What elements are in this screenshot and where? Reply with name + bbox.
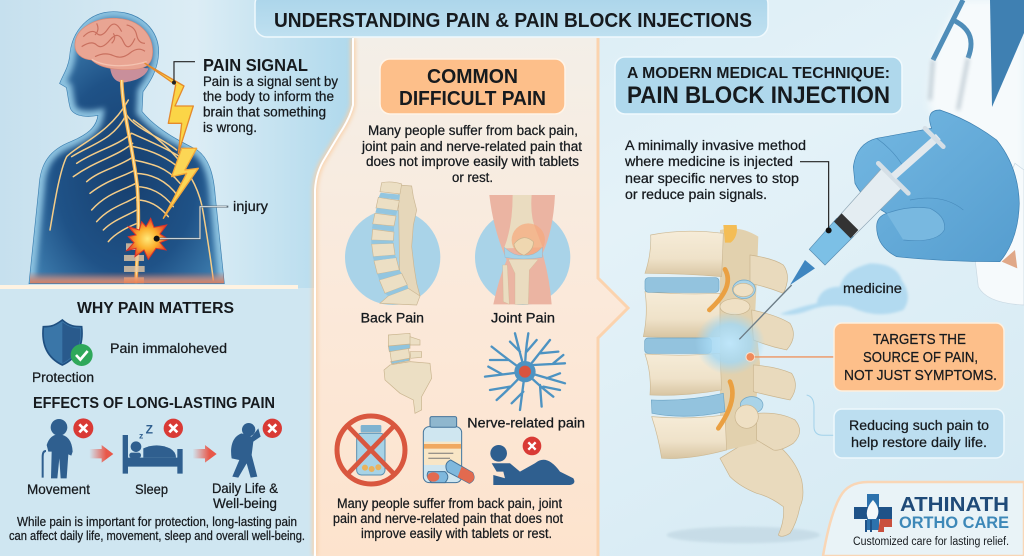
badge: sleep x <box>164 419 183 438</box>
body silhouette <box>29 12 224 283</box>
lightning bolt upper <box>145 63 193 153</box>
badge: movement x <box>73 418 93 438</box>
nerve tab <box>723 225 737 243</box>
panel: pain signal <box>0 0 356 288</box>
icon: person sleeping in bed <box>123 419 183 474</box>
text: pain signal description <box>203 74 338 135</box>
heading box: pain block injection: PAIN BLOCK INJECTION <box>627 82 890 109</box>
icon: person sleeping in bed: Z <box>146 423 153 437</box>
nerves <box>50 100 213 280</box>
title banner <box>255 0 768 37</box>
pain leader line <box>174 62 195 83</box>
text: technique description: near specific nerves to stop <box>625 171 799 186</box>
heading box: common difficult pain <box>380 59 565 114</box>
logo panel <box>823 482 1024 556</box>
text: technique description: A minimally invasive method <box>625 138 806 153</box>
doctor coat illustration <box>929 0 1024 210</box>
intervertebral discs <box>645 278 763 416</box>
text: closing description: improve easily with tablets or rest. <box>361 526 552 541</box>
arrow: movement to sleep <box>89 445 113 463</box>
label: daily life and well-being: Well-being <box>213 495 277 511</box>
sacrum <box>720 440 803 536</box>
label: nerve-related pain: Nerve-related pain <box>467 414 585 430</box>
spine illustration <box>643 225 834 543</box>
text: pain signal description: Pain is a signal sent by <box>203 74 338 89</box>
icon: crossed-out bottle <box>337 416 405 484</box>
text: pain signal description: the body to inform the <box>203 89 334 104</box>
vertebrae bodies <box>643 231 727 459</box>
label: protection: Protection <box>32 370 94 385</box>
leader dot <box>172 81 176 85</box>
label: pain description: Pain immaloheved <box>110 341 227 356</box>
red glow <box>30 272 224 283</box>
callout: targets the source: NOT JUST SYMPTOMS. <box>844 367 997 384</box>
leader line to syringe <box>800 162 829 230</box>
text: pain summary <box>9 515 305 543</box>
text: description: does not improve easily with tablets <box>366 154 579 169</box>
icon: joint pain knee <box>475 195 570 305</box>
nerve roots <box>709 269 732 428</box>
text: technique description: or reduce pain signals. <box>625 187 767 202</box>
text: pain signal description: brain that something <box>203 104 326 120</box>
callout: restore daily life: help restore daily life. <box>851 434 987 450</box>
callout: targets the source <box>834 323 1004 391</box>
text: description: joint pain and nerve-related pain that <box>361 139 582 154</box>
callout: targets the source: SOURCE OF PAIN, <box>863 349 978 366</box>
label: daily life and well-being: Daily Life & <box>212 480 279 496</box>
human figure with nervous system <box>29 12 228 283</box>
leader line to blue callout <box>807 395 834 435</box>
panel: common difficult pain <box>315 36 628 556</box>
text: closing description: Many people suffer from back pain, joint <box>337 496 562 511</box>
heading box: common difficult pain: DIFFICULT PAIN <box>399 88 546 110</box>
label: back pain: Back Pain <box>361 310 424 326</box>
text: closing description: pain and nerve-related pain that does not <box>333 511 563 526</box>
brain <box>75 18 153 82</box>
lightning bolt lower <box>163 148 198 218</box>
injury dot <box>154 236 160 242</box>
icon: shield with check <box>43 320 93 366</box>
articular processes <box>720 283 758 428</box>
syringe <box>739 128 943 339</box>
body edge highlight <box>29 12 224 283</box>
text: pain summary: While pain is important for protection, long-lasting pain <box>17 515 297 529</box>
arrow: sleep to daily life <box>193 445 217 463</box>
heading: why pain matters: WHY PAIN MATTERS <box>77 300 234 317</box>
text: pain summary: can affect daily life, movement, sleep and overall well-being. <box>9 529 305 543</box>
text: description <box>361 123 582 185</box>
spinal cord <box>122 80 138 283</box>
injection target dot <box>746 353 834 361</box>
panel: pain block injection <box>615 0 1024 556</box>
logo subtitle: ORTHO CARE <box>899 513 1009 532</box>
icon: back pain spine <box>345 182 440 305</box>
text: description: Many people suffer from back pain, <box>368 123 578 138</box>
text: pain signal description: is wrong. <box>203 120 257 135</box>
callout: restore daily life <box>834 409 1004 458</box>
text: technique description <box>624 138 806 202</box>
logo icon <box>854 494 892 532</box>
label: sleep: Sleep <box>135 481 168 497</box>
injury leader line <box>157 207 228 239</box>
label: movement: Movement <box>27 481 90 497</box>
icon: person sleeping in bed: z <box>139 430 144 440</box>
logo name: ATHINATH <box>900 494 1009 516</box>
text: technique description: where medicine is injected <box>624 154 793 169</box>
text: description: or rest. <box>452 170 493 185</box>
label: daily life and well-being <box>212 480 279 511</box>
icon: sacrum <box>384 333 432 413</box>
panel: why pain matters <box>0 285 313 556</box>
gloved hand <box>853 110 1019 262</box>
icon: medicine bottle and capsules <box>423 417 474 483</box>
icon: person with cane <box>43 418 93 478</box>
heading box: common difficult pain: COMMON <box>427 66 518 88</box>
label: joint pain: Joint Pain <box>491 310 555 326</box>
icon: nerve cell <box>485 333 565 410</box>
callout: restore daily life: Reducing such pain to <box>849 417 989 433</box>
text: closing description <box>333 496 563 541</box>
callout: targets the source: TARGETS THE <box>873 331 966 348</box>
label: injury: injury <box>233 199 268 214</box>
heading: pain signal: PAIN SIGNAL <box>203 55 308 75</box>
medicine glow <box>695 312 765 375</box>
heading: effects of long-lasting pain: EFFECTS OF LONG-LASTING PAIN <box>33 395 275 412</box>
heading box: pain block injection: A MODERN MEDICAL TECHNIQUE: <box>627 65 890 82</box>
label: medicine: medicine <box>843 280 902 296</box>
medicine cloud <box>780 263 908 315</box>
vertebrae processes <box>720 228 800 452</box>
coat sleeve <box>975 163 1024 305</box>
badge: daily life x <box>263 419 282 438</box>
injury starburst <box>127 218 168 259</box>
icon: hunched person <box>231 419 282 478</box>
heading box: pain block injection <box>615 57 902 114</box>
vertebrae near injury <box>124 243 145 283</box>
tagline: Customized care for lasting relief. <box>853 536 1009 548</box>
title banner: UNDERSTANDING PAIN & PAIN BLOCK INJECTIONS <box>274 9 752 32</box>
icon: lying person with x <box>490 437 574 485</box>
leader dot <box>826 227 832 233</box>
